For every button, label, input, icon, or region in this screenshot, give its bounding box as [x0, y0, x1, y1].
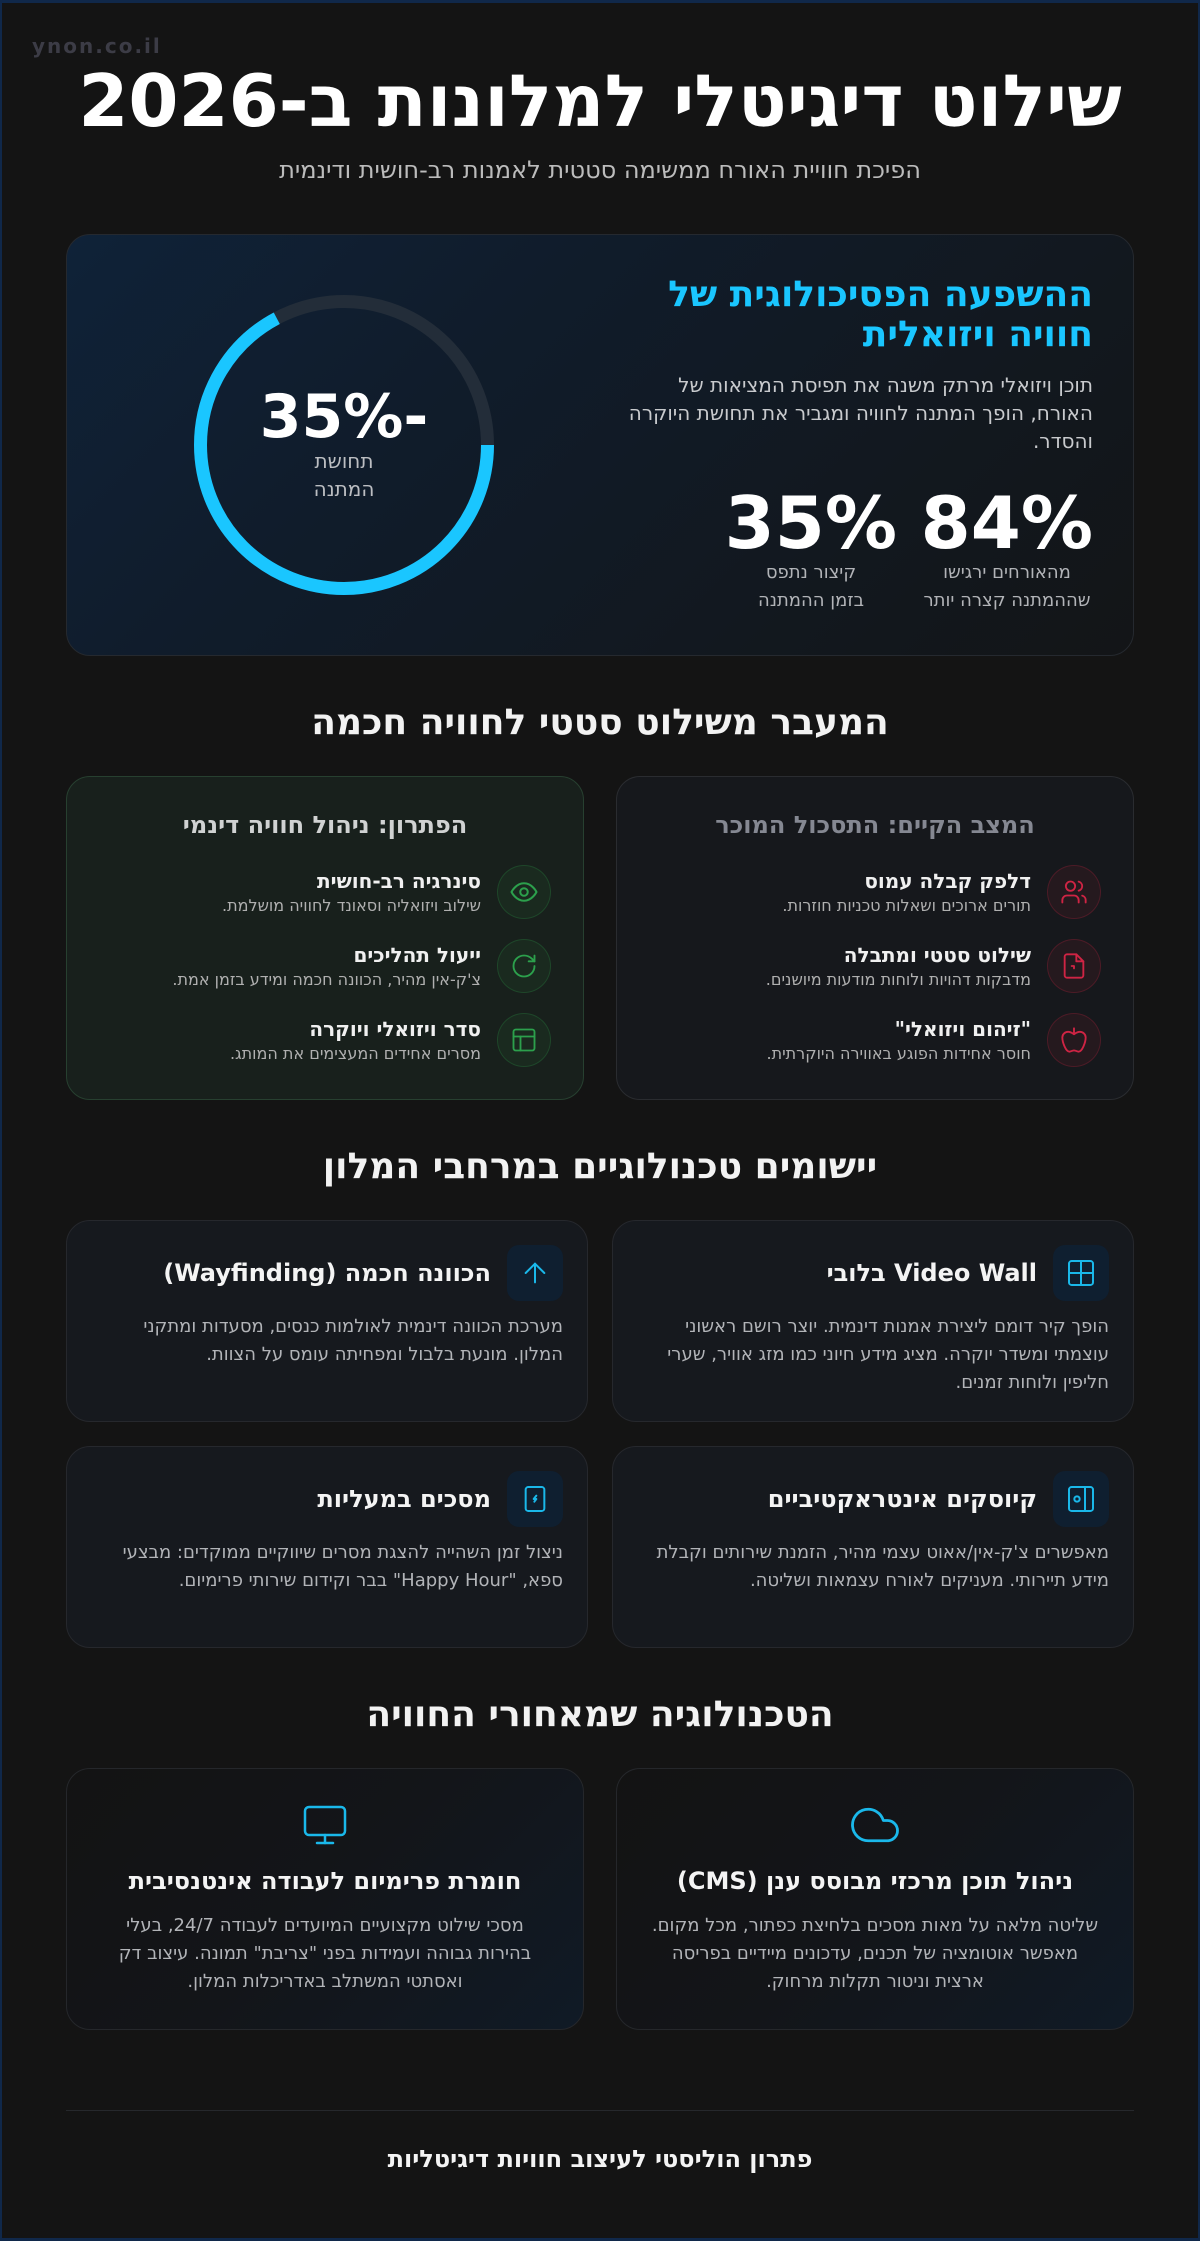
item: process — [172, 939, 551, 993]
gauge value: -35% — [260, 382, 428, 452]
item: process: צ'ק-אין מהיר, הכוונה חכמה ומידע בזמן אמת. — [172, 970, 481, 989]
card: cms: שליטה מלאה על מאות מסכים בלחיצת כפתור, מכל מקום. — [652, 1915, 1098, 1936]
card: wayfinding: המלון. מונעת בלבול ומפחיתה עומס על הצוות. — [206, 1344, 563, 1365]
text: psychological impact description: האורח, הופך המתנה לחוויה ומגביר את תחושת היוקרה — [629, 401, 1093, 425]
icon: file — [1047, 939, 1101, 993]
stat: 35 percent: 35% — [725, 481, 897, 565]
panel heading: הפתרון: ניהול חוויה דינמי — [183, 811, 467, 839]
card: kiosks — [612, 1446, 1134, 1648]
icon: eye — [497, 865, 551, 919]
item: visual pollution: "זיהום ויזואלי" — [895, 1017, 1031, 1041]
card: elevators — [66, 1446, 588, 1648]
card: video wall: חליפין ולוחות זמנים. — [955, 1372, 1109, 1393]
gauge label: המתנה — [314, 477, 374, 501]
item: multisensory — [222, 865, 551, 919]
gauge label: תחושת — [314, 449, 373, 473]
panel: solution — [66, 776, 584, 1100]
icon: cloud — [851, 1808, 899, 1842]
card: video wall: הופך קיר דומם ליצירת אמנות דינמית. יוצר רושם ראשוני — [685, 1316, 1109, 1337]
item: static signage — [766, 939, 1101, 993]
item: busy reception — [782, 865, 1101, 919]
gauge label — [314, 449, 374, 501]
card: wayfinding — [66, 1220, 588, 1422]
stat: 35 percent: קיצור נתפס — [766, 562, 856, 583]
item: busy reception: תורים ארוכים ושאלות טכניות חוזרות. — [782, 896, 1031, 915]
item: busy reception: דלפק קבלה עמוס — [864, 869, 1031, 893]
stat: 84 percent — [921, 481, 1093, 611]
card: cms — [616, 1768, 1134, 2030]
icon: apple — [1047, 1013, 1101, 1067]
card: cms: ניהול תוכן מרכזי מבוסס ענן (CMS) — [677, 1867, 1073, 1895]
subtitle: הפיכת חוויית האורח ממשימה סטטית לאמנות רב-חושית ודינמית — [279, 156, 921, 184]
card: cms: מאפשר אוטומציה של תכנים, עדכונים מיידיים בפריסה — [672, 1943, 1078, 1964]
stat: 84 percent: 84% — [921, 481, 1093, 565]
card: elevators: מסכים במעליות — [317, 1485, 491, 1513]
heading: psychological impact: חוויה ויזואלית — [863, 314, 1093, 355]
item: visual order: מסרים אחידים המעצימים את המותג. — [230, 1044, 481, 1063]
icon: arrow up — [507, 1245, 563, 1301]
card: kiosks: מידע תיירותי. מעניקים לאורח עצמאות ושליטה. — [750, 1570, 1109, 1591]
stat: 84 percent: מהאורחים ירגישו — [943, 562, 1071, 583]
card: hardware: ואסתטי המשתלב באדריכלות המלון. — [187, 1971, 463, 1992]
heading: psychological impact: ההשפעה הפסיכולוגית של — [668, 274, 1093, 315]
card: video wall: Video Wall בלובי — [827, 1259, 1037, 1287]
card: hardware: מסכי שילוט מקצועיים המיועדים לעבודה 24/7, בעלי — [126, 1915, 524, 1936]
chart: donut gauge — [194, 295, 494, 595]
item: static signage: שילוט סטטי ומתבלה — [844, 943, 1031, 967]
item: visual order — [230, 1013, 551, 1067]
item: multisensory: שילוב ויזואליה וסאונד לחוויה מושלמת. — [222, 896, 481, 915]
icon: monitor — [304, 1806, 346, 1844]
icon: kiosk — [1053, 1471, 1109, 1527]
text: psychological impact description — [629, 373, 1093, 453]
footer text: פתרון הוליסטי לעיצוב חוויות דיגיטליות — [388, 2145, 812, 2173]
stat: 84 percent: שההמתנה קצרה יותר — [923, 590, 1091, 611]
icon: layout — [497, 1013, 551, 1067]
icon: grid — [1053, 1245, 1109, 1301]
stat: 35 percent: בזמן ההמתנה — [758, 590, 864, 611]
card: elevators: ספא, "Happy Hour" בבר וקידום שירותי פרימיום. — [179, 1570, 563, 1591]
icon: refresh — [497, 939, 551, 993]
footer — [66, 2110, 1134, 2210]
heading: static to smart: המעבר משילוט סטטי לחוויה חכמה — [311, 702, 889, 743]
card: hardware: בהירות גבוהה ועמידות בפני "צריבת" תמונה. עיצוב דק — [119, 1943, 531, 1964]
card: cms: ארצית וניטור תקלות מרחוק. — [766, 1971, 984, 1992]
item: visual pollution — [766, 1013, 1101, 1067]
panel: current state — [616, 776, 1134, 1100]
card: wayfinding: הכוונה חכמה (Wayfinding) — [163, 1259, 491, 1287]
card: kiosks: מאפשרים צ'ק-אין/אאוט עצמי מהיר, הזמנת שירותים וקבלת — [657, 1542, 1109, 1563]
card: elevators: ניצול זמן השהייה להצגת מסרים שיווקיים ממוקדים: מבצעי — [123, 1542, 563, 1563]
heading: applications: יישומים טכנולוגיים במרחבי המלון — [323, 1146, 877, 1187]
title: שילוט דיגיטלי למלונות ב-2026 — [78, 59, 1122, 143]
card: video wall — [612, 1220, 1134, 1422]
item: visual order: סדר ויזואלי ויוקרה — [309, 1017, 481, 1041]
panel heading: המצב הקיים: התסכול המוכר — [715, 811, 1035, 839]
item: visual pollution: חוסר אחידות הפוגע באווירה היוקרתית. — [766, 1044, 1031, 1063]
card: kiosks: קיוסקים אינטראקטיביים — [768, 1485, 1037, 1513]
text: psychological impact description: והסדר. — [1033, 429, 1093, 453]
icon: users — [1047, 865, 1101, 919]
watermark: ynon.co.il — [32, 34, 162, 58]
panel: psychological impact — [66, 234, 1134, 656]
item: process: ייעול תהליכים — [353, 943, 481, 967]
card: video wall: עוצמתי ומשדר יוקרה. מציג מידע חיוני כמו מזג אוויר, שערי — [667, 1344, 1109, 1365]
card: hardware: חומרת פרימיום לעבודה אינטנסיבית — [129, 1867, 521, 1895]
item: static signage: מדבקות דהויות ולוחות מודעות מיושנים. — [766, 970, 1031, 989]
icon: elevator screen — [507, 1471, 563, 1527]
item: multisensory: סינרגיה רב-חושית — [317, 869, 481, 893]
text: psychological impact description: תוכן ויזואלי מרתק משנה את תפיסת המציאות של — [678, 373, 1093, 397]
heading: psychological impact — [668, 274, 1093, 355]
heading: technology: הטכנולוגיה שמאחורי החוויה — [366, 1694, 834, 1735]
card: hardware — [66, 1768, 584, 2030]
stat: 35 percent — [725, 481, 897, 611]
card: wayfinding: מערכת הכוונה דינמית לאולמות כנסים, מסעדות ומתקני — [143, 1316, 563, 1337]
